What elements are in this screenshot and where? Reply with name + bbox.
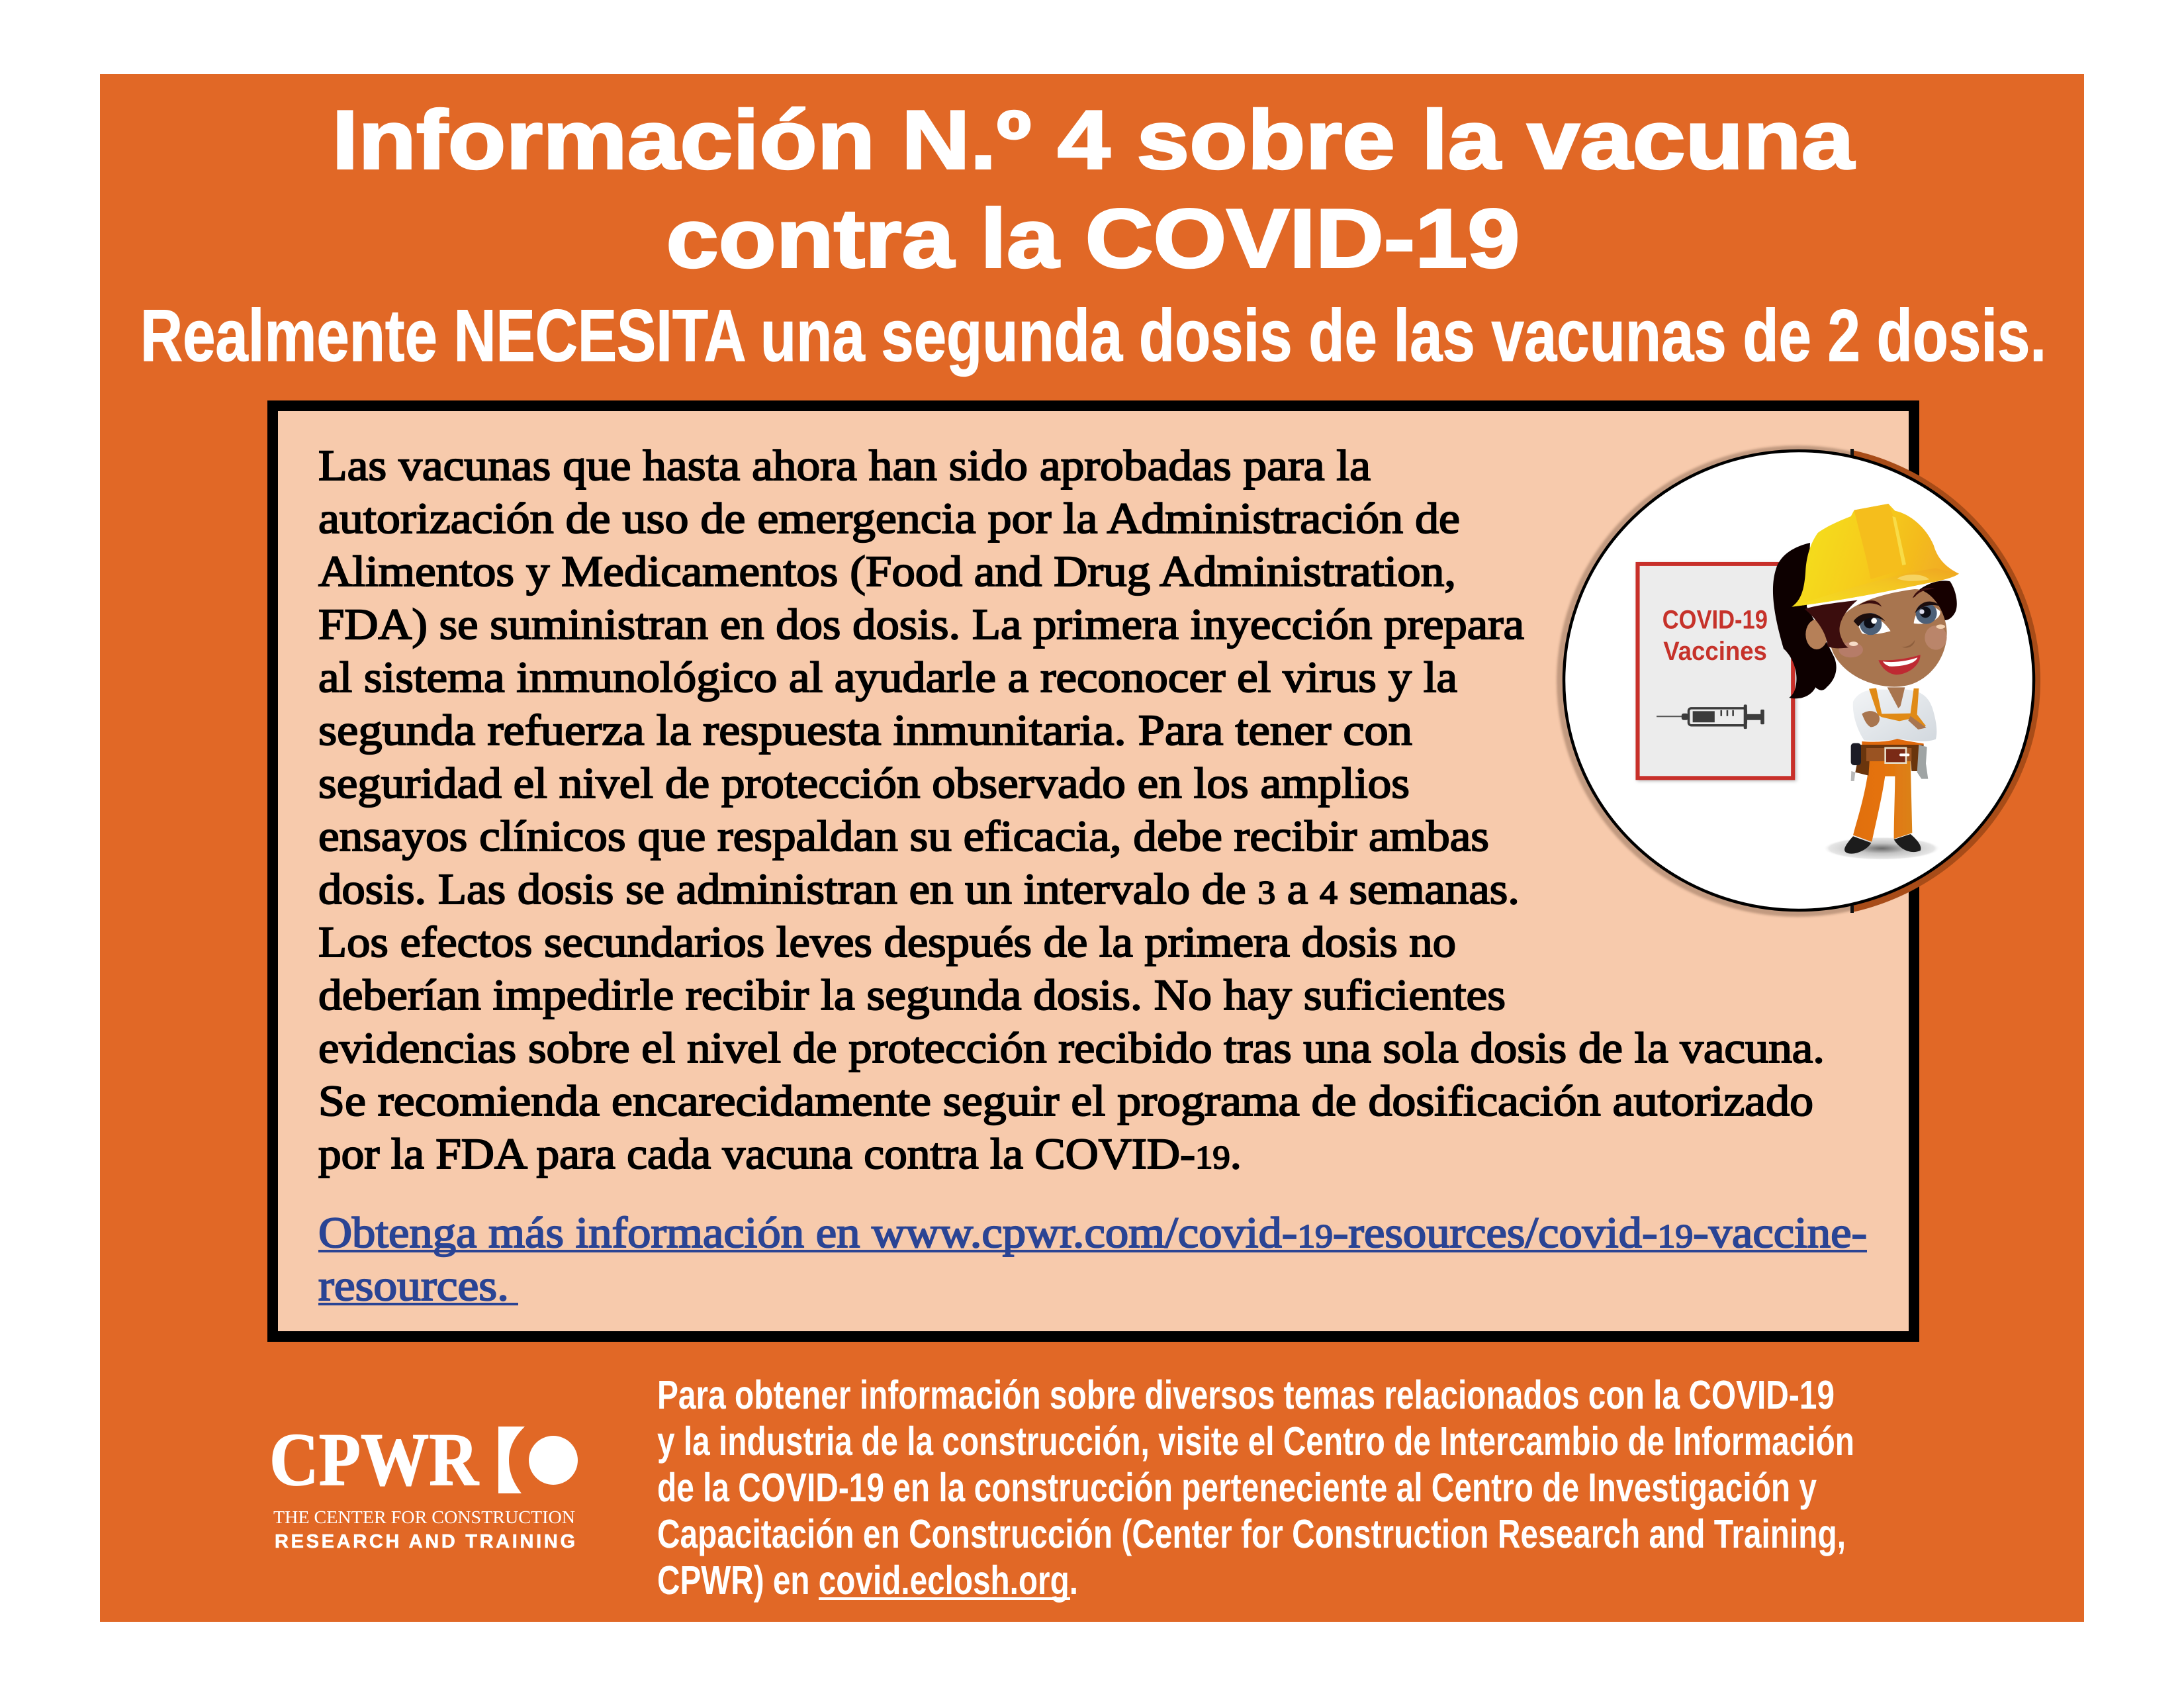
body text: Se recomienda encarecidamente seguir el programa de dosificación autorizado <box>318 1077 1813 1125</box>
body text: dosis. Las dosis se administran en un intervalo de 3 a 4 semanas. <box>318 865 1520 914</box>
body text: ensayos clínicos que respaldan su eficacia, debe recibir ambas <box>318 812 1489 861</box>
body text: FDA) se suministran en dos dosis. La primera inyección prepara <box>318 600 1524 649</box>
body text: evidencias sobre el nivel de protección recibido tras una sola dosis de la vacuna. <box>318 1024 1825 1072</box>
footer text <box>657 1372 1854 1603</box>
footer text: Capacitación en Construcción (Center for Construction Research and Training, <box>657 1511 1846 1556</box>
title <box>332 93 1855 285</box>
footer text: Para obtener información sobre diversos temas relacionados con la COVID-19 <box>657 1372 1835 1417</box>
body text: Alimentos y Medicamentos (Food and Drug Administration, <box>318 547 1456 596</box>
footer text: CPWR) en covid.eclosh.org. <box>657 1558 1078 1603</box>
icon: bracket <box>498 1427 525 1493</box>
panel: main text box <box>267 400 1919 1342</box>
body text: Los efectos secundarios leves después de la primera dosis no <box>318 918 1456 966</box>
body text: seguridad el nivel de protección observado en los amplios <box>318 759 1410 808</box>
logo: CPWR <box>269 1417 578 1552</box>
vaccine poster <box>1637 563 1796 781</box>
logo: CPWR: RESEARCH AND TRAINING <box>275 1531 575 1552</box>
icon: dot <box>529 1436 578 1485</box>
worker body <box>1823 687 1940 860</box>
body text: al sistema inmunológico al ayudarle a reconocer el virus y la <box>318 653 1457 702</box>
body text: por la FDA para cada vacuna contra la COVID- 19. <box>318 1130 1242 1178</box>
illustration: circle with worker and vaccine poster <box>1557 444 2040 918</box>
link text: Obtenga más información en www.cpwr.com/covid- 19-resources/covid- 19-vaccine- <box>318 1209 1867 1257</box>
body text: segunda refuerza la respuesta inmunitaria. Para tener con <box>318 706 1412 755</box>
footer text: y la industria de la construcción, visite el Centro de Intercambio de Información <box>657 1419 1854 1464</box>
body text <box>318 442 1825 1178</box>
body text: deberían impedirle recibir la segunda dosis. No hay suficientes <box>318 971 1506 1019</box>
link text: resources. <box>318 1262 509 1310</box>
body text: autorización de uso de emergencia por la Administración de <box>318 494 1460 543</box>
logo: CPWR: CPWR <box>269 1417 480 1501</box>
worker head <box>1773 504 1959 698</box>
icon: construction worker <box>1773 504 1959 860</box>
link text <box>318 1209 1867 1310</box>
body text: Las vacunas que hasta ahora han sido aprobadas para la <box>318 442 1371 490</box>
icon: syringe <box>1657 704 1764 729</box>
vaccine poster: Vaccines <box>1663 636 1767 666</box>
footer text: de la COVID-19 en la construcción perteneciente al Centro de Investigación y <box>657 1465 1817 1510</box>
vaccine poster: COVID-19 <box>1662 605 1768 634</box>
logo: CPWR: THE CENTER FOR CONSTRUCTION <box>273 1507 575 1527</box>
